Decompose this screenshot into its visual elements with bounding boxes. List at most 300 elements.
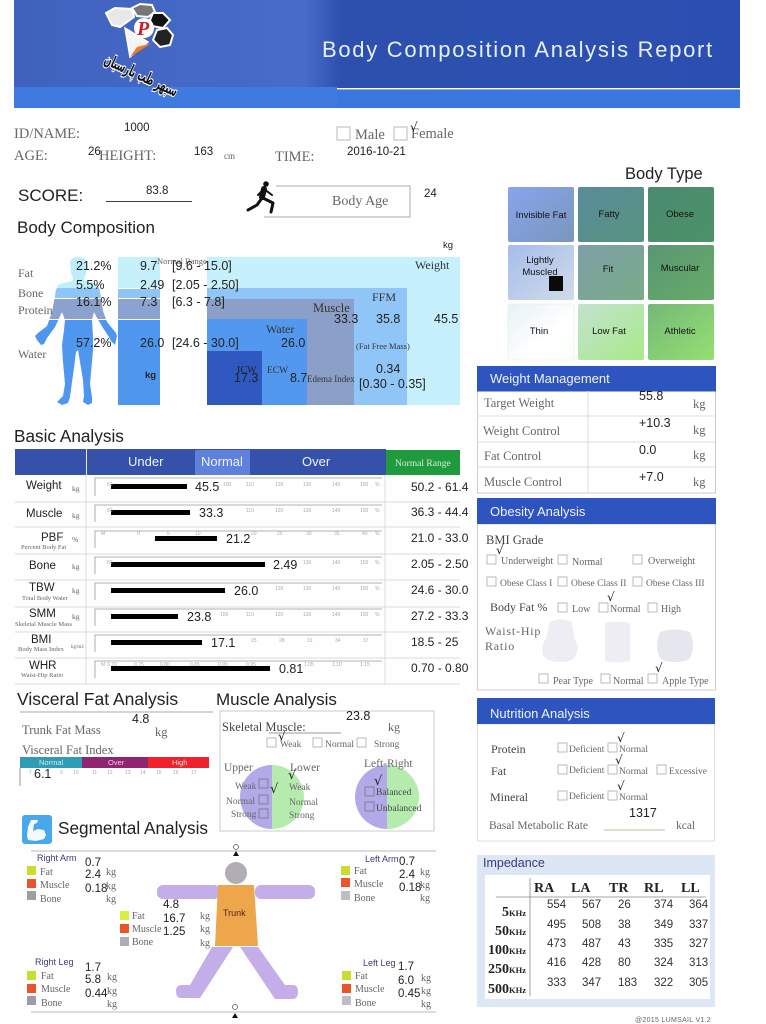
trunk: Fat [132, 911, 145, 922]
panel: impedance: 100KHz [488, 943, 526, 958]
panel: impedance: 43 [618, 938, 631, 950]
block labels: FFM [372, 290, 396, 304]
body figure: Trunk [223, 908, 246, 918]
panel: impedance: 80 [618, 957, 631, 969]
row: TBW: Total Body Water [22, 595, 69, 602]
row: PBF: % [72, 535, 78, 544]
panel: impedance: 349 [654, 919, 673, 931]
row: BMI: 17.1 [211, 636, 235, 650]
pie: upper lower: Normal [226, 797, 255, 807]
left arm: 0.7 [399, 856, 415, 868]
row: muscle: % [375, 508, 380, 514]
panel: weight management: Target Weight [484, 396, 555, 410]
row: SMM: 100 [220, 612, 229, 618]
visceral fat scale: 17 [191, 770, 197, 776]
body labels: Bone [18, 286, 43, 300]
panel: nutrition analysis: Normal [619, 767, 648, 777]
visceral fat scale: 7 [29, 770, 32, 776]
body labels [18, 266, 53, 361]
tile: obese: Obese [666, 209, 694, 220]
trunk: 1.25 [163, 926, 185, 938]
panel: nutrition analysis: √ [615, 753, 623, 767]
left leg [342, 958, 431, 1010]
panel: muscle analysis: Weak [280, 740, 302, 750]
row: muscle: 60 [107, 508, 113, 514]
panel: visceral fat analysis [17, 689, 213, 786]
left arm: Fat [354, 866, 367, 877]
nested composition blocks [207, 257, 460, 405]
panel: obesity analysis: Pear Type [553, 676, 593, 687]
panel: impedance: 313 [689, 957, 708, 969]
right arm: kg [106, 894, 116, 905]
panel: impedance: TR [609, 881, 629, 896]
body figure [157, 862, 315, 999]
panel: impedance: 374 [654, 899, 674, 911]
header banner [14, 0, 740, 108]
panel: visceral fat analysis: Visceral Fat Analysis [17, 689, 178, 709]
row: muscle [26, 505, 469, 522]
pie: upper lower: Strong [231, 810, 257, 820]
block labels: ECW [267, 366, 288, 376]
row: TBW: 26.0 [234, 584, 258, 598]
left leg: Left Leg [363, 958, 396, 968]
panel: segmental analysis [27, 844, 436, 1018]
panel: obesity analysis: Waist-Hip [485, 624, 541, 638]
row: PBF [21, 531, 469, 551]
right leg [27, 957, 117, 1010]
right leg: Muscle [41, 984, 71, 995]
row: PBF: 0 [137, 531, 140, 537]
row: SMM: 140 [332, 612, 341, 618]
panel: impedance: 50KHz [495, 924, 526, 939]
pie: upper lower: Lower [290, 762, 320, 774]
row: weight: 140 [332, 482, 341, 488]
panel: impedance: 473 [547, 938, 566, 950]
right leg: Fat [41, 971, 54, 982]
tile: obese [648, 187, 714, 242]
patient info: ID/NAME: [14, 126, 80, 142]
panel: nutrition analysis: Deficient [569, 791, 605, 802]
panel: obesity analysis: Normal [572, 557, 603, 568]
right arm: 0.7 [85, 857, 101, 869]
panel: nutrition analysis: kcal [676, 820, 695, 832]
row: weight: 100 [223, 482, 232, 488]
row: BMI: kg/m2 [71, 645, 84, 650]
right arm: Fat [40, 867, 53, 878]
row: TBW: % [375, 586, 380, 592]
panel: impedance: LA [571, 881, 591, 896]
panel: impedance: 26 [618, 899, 631, 911]
right arm: 2.4 [85, 869, 102, 881]
pie: upper lower [224, 762, 320, 829]
panel: obesity analysis: Obese Class II [571, 579, 626, 589]
row: bone: 2.49 [273, 558, 297, 572]
row: bone: kg [72, 562, 80, 571]
right arm [27, 853, 116, 905]
row: muscle: 36.3 - 44.4 [411, 505, 469, 519]
table header [15, 449, 460, 475]
row: SMM: 130 [303, 612, 312, 618]
panel: body type [508, 165, 714, 360]
row: muscle: 150 [360, 508, 369, 514]
percentages: 21.2% [76, 259, 111, 273]
visceral fat scale: High [172, 758, 187, 767]
panel: impedance: 554 [547, 899, 567, 911]
row: weight: 120 [275, 482, 284, 488]
row: WHR: 0.90 [218, 662, 228, 668]
panel: nutrition analysis: Normal [619, 793, 648, 803]
panel: obesity analysis: √ [655, 661, 663, 675]
panel: weight management: 0.0 [639, 443, 656, 457]
patient info: 26 [88, 146, 101, 158]
row: BMI: 31 [307, 638, 313, 644]
left leg: Fat [355, 971, 368, 982]
visceral fat scale: 10 [73, 770, 79, 776]
panel: impedance: 324 [654, 957, 674, 969]
panel: body type: Body Type [625, 165, 703, 183]
visceral fat scale: 12 [107, 770, 113, 776]
panel: obesity analysis: Underweight [501, 556, 553, 567]
visceral fat scale: 6.1 [34, 767, 51, 781]
left arm: kg [420, 880, 430, 891]
panel: obesity analysis: Ratio [485, 639, 515, 653]
patient info: 1000 [124, 122, 150, 134]
row: SMM: 23.8 [187, 610, 211, 624]
row: SMM: 150 [360, 612, 369, 618]
row: SMM: kg [72, 612, 80, 621]
patient info: HEIGHT: [99, 148, 156, 164]
visceral fat scale [20, 757, 209, 786]
row: PBF: Percent Body Fat [21, 544, 66, 551]
pie: upper lower: Normal [289, 798, 318, 808]
row: bone [29, 557, 469, 574]
normal ranges: [9.6 - 15.0] [172, 259, 232, 273]
row: PBF: 25 [277, 531, 283, 537]
panel: weight management: 55.8 [639, 389, 663, 403]
panel: muscle analysis: √ [278, 729, 286, 743]
left arm: 2.4 [399, 869, 416, 881]
left arm: Muscle [354, 879, 384, 890]
row: TBW: kg [72, 586, 80, 595]
tile: lightly muscled: Lightly [526, 255, 554, 266]
pie: left right: Left-Right [364, 758, 413, 770]
visceral fat scale: 11 [92, 770, 97, 776]
body age [264, 186, 437, 217]
row: WHR: WHR [29, 660, 56, 672]
row: BMI [18, 634, 459, 653]
panel: impedance: 5KHz [502, 905, 526, 920]
panel: muscle analysis: 23.8 [346, 709, 370, 723]
row: WHR: 1.05 [304, 662, 314, 668]
left leg: 6.0 [398, 975, 414, 987]
row: WHR [21, 660, 469, 679]
panel: obesity analysis: Overweight [648, 556, 695, 567]
icon: runner [248, 181, 273, 212]
row: bone: % [375, 560, 380, 566]
row: weight: 45.5 [195, 480, 219, 494]
row: muscle: 33.3 [199, 506, 223, 520]
row: BMI: Body Mass Index [18, 646, 65, 653]
row: BMI: 25 [251, 638, 257, 644]
row: WHR: 0.95 [246, 662, 256, 668]
panel: impedance: 250KHz [488, 962, 526, 977]
percentages [76, 259, 111, 350]
panel: muscle analysis: Normal [325, 740, 354, 750]
row: muscle: Muscle [26, 508, 62, 520]
left arm: Left Arm [365, 854, 399, 864]
row: muscle: 120 [275, 508, 284, 514]
panel: obesity analysis: Normal [613, 676, 644, 687]
table header: Over [302, 454, 331, 469]
row: SMM: Skeletal Muscle Mass [15, 621, 73, 628]
tile: lightly muscled [508, 245, 574, 300]
row: WHR: 0.70 [107, 662, 117, 668]
panel: basic analysis table [15, 449, 469, 685]
mass values: 7.3 [140, 295, 157, 309]
score: SCORE: [18, 186, 83, 205]
row: WHR: 1.15 [360, 662, 370, 668]
icon: flexed arm [22, 815, 52, 844]
tile: thin: Thin [530, 326, 548, 337]
panel: impedance: 487 [582, 938, 601, 950]
heading: muscle analysis: Muscle Analysis [216, 690, 337, 709]
normal ranges: Normal Range [157, 256, 207, 266]
panel: nutrition analysis: Deficient [569, 765, 605, 776]
panel: weight management: Weight Control [483, 424, 561, 438]
row: bone: 130 [303, 560, 312, 566]
right leg: kg [107, 999, 117, 1010]
row: TBW: TBW [29, 582, 55, 594]
panel: impedance: 183 [618, 977, 637, 989]
panel: weight management: Weight Management [490, 371, 610, 386]
row: PBF: 10 [195, 531, 201, 537]
score: 83.8 [146, 185, 168, 197]
body age: 24 [424, 188, 437, 200]
block labels [234, 258, 458, 391]
logo: سپهر طب پارسیان [101, 51, 181, 101]
pie: upper lower: √ [288, 768, 297, 783]
row: PBF: 40 [362, 531, 368, 537]
heading: segmental analysis: Segmental Analysis [58, 818, 208, 838]
block labels: 33.3 [334, 312, 358, 326]
panel: obesity analysis: Obese Class III [646, 579, 705, 589]
block labels: 8.7 [290, 371, 307, 385]
stacked bar [118, 257, 160, 405]
panel: nutrition analysis [477, 698, 715, 841]
left arm: kg [420, 893, 430, 904]
row: BMI: 34 [335, 638, 341, 644]
panel: obesity analysis: Normal [610, 604, 641, 615]
panel: impedance: 567 [582, 899, 601, 911]
panel: nutrition analysis: √ [617, 731, 625, 745]
body labels: Water [18, 347, 46, 361]
trunk: kg [200, 924, 210, 935]
panel: impedance: 347 [582, 977, 601, 989]
row: SMM [15, 608, 469, 628]
panel: impedance: Impedance [483, 856, 545, 870]
table header: Normal [201, 454, 243, 469]
logo: P [136, 18, 150, 40]
score [18, 185, 192, 205]
panel: nutrition analysis: Excessive [669, 767, 707, 777]
patient info: Female [411, 126, 454, 142]
panel: obesity analysis: High [661, 604, 681, 615]
trunk: kg [200, 911, 210, 922]
right arm: kg [106, 881, 116, 892]
left leg: kg [421, 986, 431, 997]
panel: body composition: kg [443, 240, 453, 251]
row: SMM: 120 [275, 612, 284, 618]
tile: lightly muscled: Muscled [522, 267, 558, 278]
panel: nutrition analysis: Deficient [569, 744, 605, 755]
panel: obesity analysis: Obesity Analysis [490, 504, 586, 519]
right arm: kg [106, 867, 116, 878]
row: weight: 60 [107, 482, 113, 488]
panel: obesity analysis: Body Fat % [490, 600, 547, 614]
block labels: 0.34 [376, 362, 400, 376]
block labels: 35.8 [376, 312, 400, 326]
heading: basic analysis: Basic Analysis [14, 426, 124, 446]
block labels: Muscle [313, 301, 350, 315]
right leg: 5.8 [85, 974, 101, 986]
tile: muscular: Muscular [661, 263, 699, 274]
panel: impedance: 333 [547, 977, 566, 989]
tile: fatty [578, 187, 644, 242]
left leg: Bone [355, 998, 377, 1009]
body shape: apple [657, 630, 693, 662]
row: SMM: SMM [29, 608, 56, 620]
footer copyright: @2015 LUMSAIL V1.2 [635, 1017, 711, 1024]
right arm: 0.18 [85, 883, 107, 895]
block labels: 45.5 [434, 312, 458, 326]
row: PBF: 30 [306, 531, 312, 537]
row: BMI: BMI [31, 634, 51, 646]
tile: invisible fat [508, 187, 574, 242]
panel: weight management: +7.0 [639, 470, 664, 484]
left leg: 0.45 [398, 988, 420, 1000]
row: PBF: % [375, 531, 380, 537]
row: weight: 150 [360, 482, 369, 488]
pie: upper lower: Strong [289, 811, 315, 821]
panel: obesity analysis: BMI Grade [486, 533, 544, 547]
panel: nutrition analysis: Nutrition Analysis [490, 706, 590, 721]
row: muscle: kg [72, 511, 80, 520]
right leg: 1.7 [85, 962, 101, 974]
block labels: 26.0 [281, 336, 305, 350]
left arm: 0.18 [399, 882, 421, 894]
row: bone: 60 [107, 560, 113, 566]
trunk [120, 899, 210, 949]
row: WHR: Waist-Hip Ratio [21, 672, 63, 679]
tile: low fat: Low Fat [592, 326, 626, 337]
block labels: (Fat Free Mass) [356, 341, 410, 351]
row: BMI: 28 [279, 638, 285, 644]
tile: athletic: Athletic [664, 326, 696, 337]
row: PBF: PBF [41, 532, 63, 544]
right arm: Right Arm [37, 853, 77, 863]
body age: Body Age [332, 194, 388, 209]
patient info: TIME: [275, 149, 314, 165]
panel: weight management: kg [693, 448, 706, 462]
table header: Under [128, 454, 164, 469]
row: PBF: M [101, 531, 105, 537]
row: SMM: 110 [246, 612, 254, 618]
tile: thin [508, 304, 574, 360]
trunk: Bone [132, 937, 154, 948]
row: TBW [22, 582, 469, 602]
pie: upper lower: Weak [235, 782, 257, 792]
panel: impedance: 495 [547, 919, 566, 931]
visceral fat scale: 14 [140, 770, 146, 776]
panel: visceral fat analysis: Trunk Fat Mass [22, 723, 101, 737]
row: bone: Bone [29, 560, 56, 572]
row: weight [26, 478, 469, 496]
panel: nutrition analysis: Normal [619, 745, 648, 755]
left leg: kg [421, 973, 431, 984]
panel: weight management: kg [693, 475, 706, 489]
tile: fit: Fit [603, 264, 614, 275]
normal ranges: [24.6 - 30.0] [172, 336, 239, 350]
panel: muscle analysis [220, 709, 434, 831]
visceral fat scale: 9 [60, 770, 63, 776]
panel: weight management [477, 366, 716, 493]
row: SMM: % [375, 612, 380, 618]
row: muscle: 130 [303, 508, 312, 514]
panel: impedance: 500KHz [488, 982, 526, 997]
body shape: pear [542, 620, 578, 662]
mass values: 26.0 [140, 336, 164, 350]
block labels: Edema Index [307, 374, 355, 384]
pie: upper lower: √ [270, 782, 279, 797]
row: TBW: 120 [275, 586, 284, 592]
panel: visceral fat analysis: Visceral Fat Index [22, 743, 114, 757]
row: WHR: 0.85 [190, 662, 200, 668]
panel: impedance: 335 [654, 938, 673, 950]
trunk: Muscle [132, 924, 162, 935]
panel: weight management: Muscle Control [484, 475, 563, 489]
row: weight: 130 [303, 482, 312, 488]
panel: impedance: RL [644, 881, 663, 896]
row: WHR: 0.81 [279, 662, 303, 676]
left leg: kg [421, 999, 431, 1010]
patient info: cm [224, 151, 235, 161]
body labels: Fat [18, 266, 34, 280]
row: weight: 110 [246, 482, 254, 488]
visceral fat scale: 15 [156, 770, 162, 776]
body silhouette [35, 257, 117, 405]
panel: muscle analysis: Strong [374, 740, 400, 750]
row: SMM: 27.2 - 33.3 [411, 609, 469, 623]
body shape: normal [605, 622, 630, 662]
normal ranges: [2.05 - 2.50] [172, 278, 239, 292]
visceral fat scale: 13 [125, 770, 131, 776]
visceral fat scale: 16 [173, 770, 179, 776]
percentages: 5.5% [76, 278, 104, 292]
row: weight: 50.2 - 61.4 [411, 480, 469, 494]
right leg: kg [107, 972, 117, 983]
panel: body composition [18, 240, 460, 410]
panel: muscle analysis: kg [388, 720, 400, 734]
row: TBW: 130 [303, 586, 312, 592]
pie: upper lower: Upper [224, 762, 253, 774]
row: TBW: 140 [332, 586, 341, 592]
normal ranges: [6.3 - 7.8] [172, 295, 225, 309]
panel: obesity analysis: Apple Type [662, 676, 709, 687]
panel: impedance: RA [534, 881, 555, 896]
panel: nutrition analysis: Basal Metabolic Rate [489, 820, 588, 832]
row: bone: 2.05 - 2.50 [411, 557, 469, 571]
right leg: Right Leg [35, 957, 74, 967]
